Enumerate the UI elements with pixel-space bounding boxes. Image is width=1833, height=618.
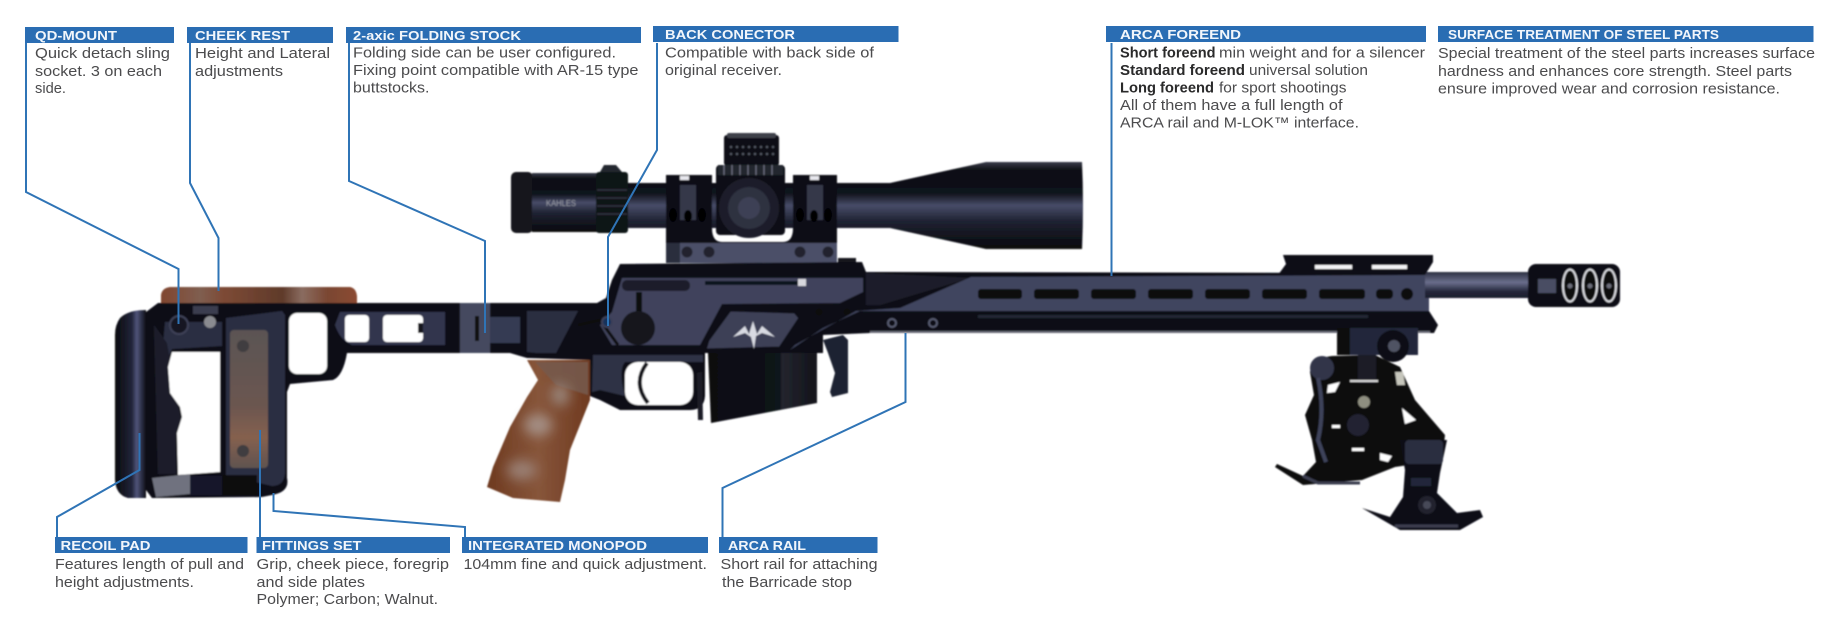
body text: Short rail for attaching [720,557,878,573]
body text: adjustments [195,64,283,80]
body text: Quick detach sling [35,46,170,62]
QD socket [170,316,188,334]
body text: the Barricade stop [722,575,852,591]
foreend M-LOK slots [978,288,1413,300]
rear leg [1275,355,1445,485]
scope [511,133,1083,264]
header bar [256,537,450,553]
elevation turret [718,133,783,175]
line: QD-mount [26,43,178,324]
line: ARCA rail [722,333,906,538]
body text: Features length of pull and [55,557,244,573]
line: back connector [608,43,657,326]
body text: All of them have a full length of [1120,98,1344,114]
callout: surface treatment [1438,26,1815,98]
heading: BACK CONECTOR [665,27,796,42]
body text: Short foreend [1120,46,1216,62]
callout: back connector [653,26,898,79]
magazine [708,353,817,423]
header bar [462,537,708,553]
callout: folding stock [346,27,641,96]
monopod lever [823,335,848,397]
body text: Special treatment of the steel parts increases surface [1438,46,1815,62]
bolt knob [621,292,655,345]
scope: KAHLES [546,199,576,208]
callout: QD-mount [25,27,174,97]
stock frame [146,303,600,498]
heading: INTEGRATED MONOPOD [468,538,647,553]
body text: side. [35,81,66,97]
logo panel [705,310,800,350]
line: folding stock [349,43,485,333]
header bar [25,27,174,43]
barrel [1425,272,1533,298]
body text [1120,46,1425,132]
heading: QD-MOUNT [35,28,117,43]
scope rings and saddle [666,165,837,238]
butt pad [115,310,146,498]
line: cheek rest [190,43,218,291]
bipod mount [1337,328,1418,362]
wood pistol grip [487,360,590,502]
callout: ARCA rail [719,537,878,591]
body text: Compatible with back side of [665,46,875,62]
back connector socket [602,317,612,327]
large stock opening [288,312,328,375]
body text: for sport shootings [1219,80,1346,96]
body text: hardness and enhances core strength. Steel parts [1438,64,1792,80]
stock rail [335,312,445,345]
callout: recoil pad [55,537,248,591]
header bar [187,27,333,43]
line: ARCA foreend [1110,43,1112,276]
callout: integrated monopod [462,537,708,573]
callout: cheek rest [187,27,333,80]
body text: Polymer; Carbon; Walnut. [256,592,438,608]
front leg [1362,440,1483,530]
body text: ARCA rail and M-LOK™ interface. [1120,116,1359,132]
heading: 2-axic FOLDING STOCK [353,28,522,43]
side plate [230,330,268,468]
body text: original receiver. [665,63,782,79]
body text: ensure improved wear and corrosion resistance. [1438,82,1780,98]
bipod [1275,328,1483,530]
body text: Height and Lateral [195,46,330,62]
callout: ARCA foreend [1106,26,1426,132]
trigger [640,363,648,403]
receiver and chassis [510,262,1438,420]
body text: buttstocks. [353,80,430,96]
scope base mount [666,228,856,264]
leader lines [26,43,1112,538]
folding hinge [460,303,578,355]
top accessory rail [1278,255,1433,275]
cheek rest [161,287,357,303]
body text: Standard foreend [1120,63,1245,79]
trigger guard opening [625,362,693,405]
heading: SURFACE TREATMENT OF STEEL PARTS [1448,27,1719,42]
line: recoil pad [57,433,140,538]
foreend upper [790,275,1429,350]
heading: FITTINGS SET [262,538,362,553]
body text: and side plates [256,575,365,591]
foreend screws [888,319,937,327]
body text: Grip, cheek piece, foregrip [256,557,449,573]
header bar [719,537,878,553]
line: fittings set [259,430,261,538]
heading: ARCA FOREEND [1120,27,1241,42]
header bar [346,27,641,43]
callout: fittings set [256,537,450,608]
stock window cut-out [168,352,220,475]
header bar [55,537,248,553]
header bar [1438,26,1814,42]
body text: 104mm fine and quick adjustment. [464,557,707,573]
bipod gap highlights [1327,382,1416,462]
body text: Long foreend [1120,80,1214,96]
body text: socket. 3 on each [35,64,162,80]
lower receiver [592,355,703,396]
rifle illustration [115,133,1620,530]
body text: min weight and for a silencer [1219,46,1425,62]
heading: ARCA RAIL [728,538,806,553]
heading: CHEEK REST [195,28,290,43]
body text: universal solution [1249,63,1368,79]
body text: height adjustments. [55,575,194,591]
body text: Folding side can be user configured. [353,46,616,62]
header bar [1106,26,1426,42]
heading: RECOIL PAD [60,538,150,553]
muzzle brake [1528,264,1620,307]
body text: Fixing point compatible with AR-15 type [353,63,638,79]
line: integrated monopod [274,493,465,538]
header bar [653,26,898,42]
